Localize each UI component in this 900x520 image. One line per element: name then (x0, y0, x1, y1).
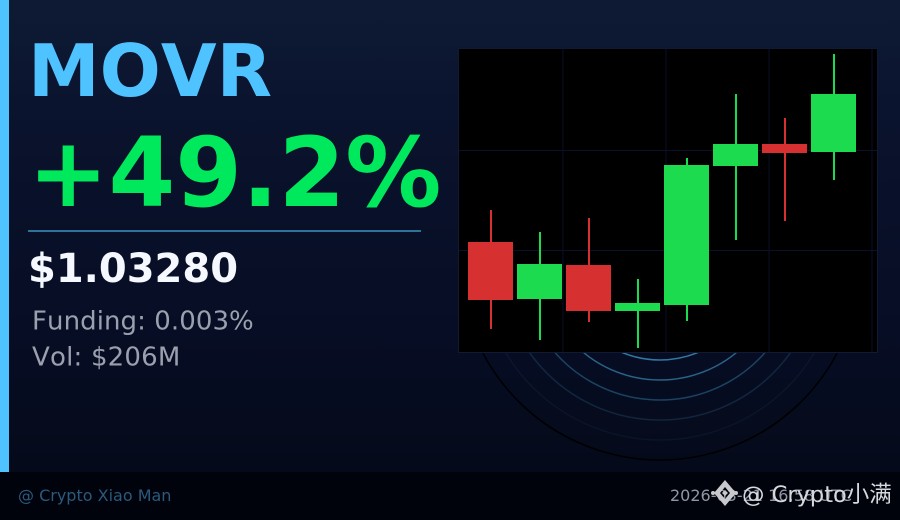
price: $1.03280 (28, 246, 238, 292)
watermark logo (711, 480, 738, 506)
accent bar (0, 0, 9, 472)
footer credit: @ Crypto Xiao Man (18, 486, 171, 505)
candle 2 (517, 232, 562, 340)
concentric rings (460, 60, 860, 460)
candle 8 (811, 54, 856, 180)
funding rate: Funding: 0.003% (32, 306, 254, 336)
footer bar (0, 472, 900, 520)
chart panel (458, 48, 878, 352)
change percentage: +49.2% (28, 117, 441, 229)
candle 5 (664, 158, 709, 321)
candle 7 (762, 118, 807, 221)
divider (28, 230, 421, 232)
volume: Vol: $206M (32, 342, 181, 372)
title: MOVR: MOVR (28, 29, 272, 113)
candle 1 (468, 210, 513, 329)
candlestick chart (458, 48, 878, 352)
watermark text: @ Crypto小满 (742, 482, 892, 508)
candle 4 (615, 279, 660, 348)
candle 3 (566, 218, 611, 322)
timestamp: 2026-03-21 16:58 UTC (670, 486, 852, 505)
candle 6 (713, 94, 758, 240)
